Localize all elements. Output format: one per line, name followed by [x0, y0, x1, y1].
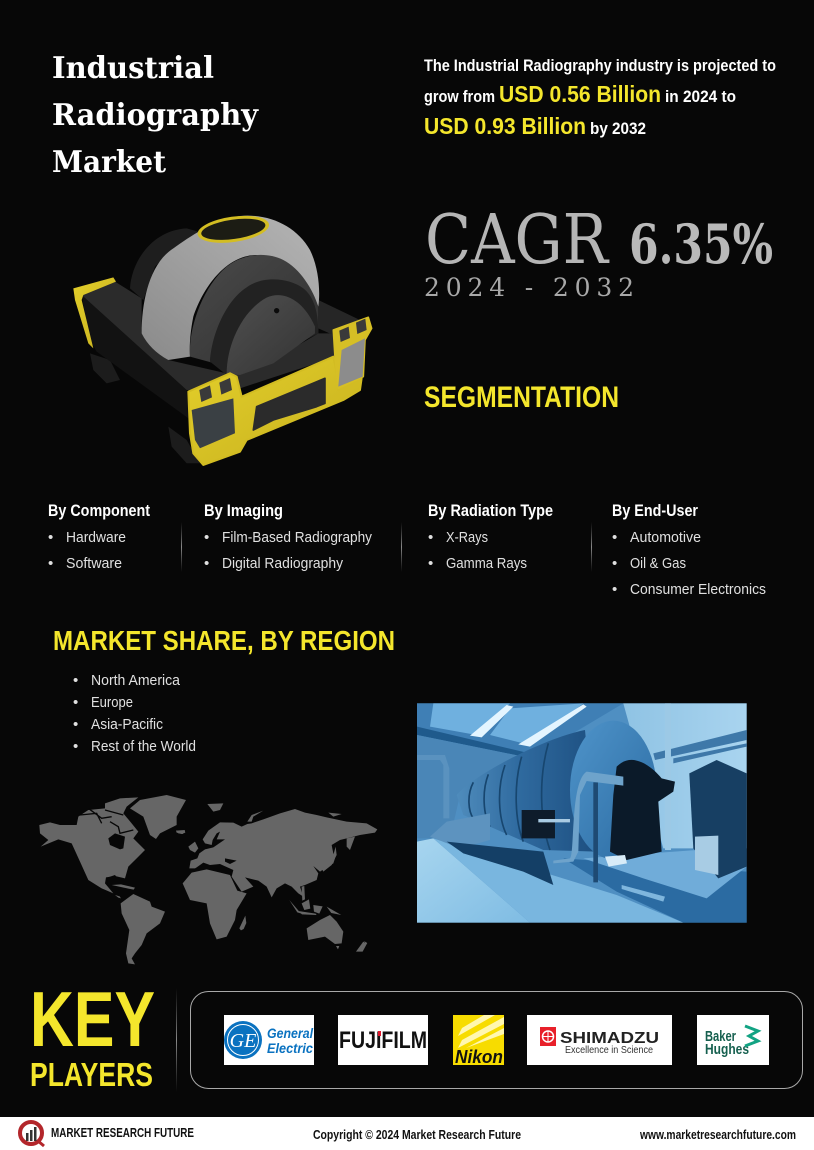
- column: by imaging: [204, 501, 372, 572]
- footer bar: Copyright © 2024 Market Research Future: [313, 1127, 521, 1142]
- column: by radiation type: •: [428, 529, 433, 546]
- market projection text: in 2024 to: [665, 87, 736, 106]
- region list: [73, 672, 196, 755]
- column: by component: By Component: [48, 501, 150, 520]
- market projection text: grow from: [424, 87, 495, 106]
- region list: •: [73, 738, 78, 755]
- market projection text: by 2032: [590, 119, 646, 138]
- logo: Baker Hughes: Baker: [705, 1028, 736, 1045]
- market projection text: USD 0.56 Billion: [499, 81, 661, 107]
- CAGR figure: [424, 201, 773, 302]
- icon: market research future logo: [20, 1122, 44, 1146]
- market projection text: [424, 56, 776, 139]
- region list: Europe: [91, 694, 133, 711]
- title: [52, 51, 260, 180]
- column: by radiation type: X-Rays: [446, 529, 488, 546]
- market projection text: USD 0.93 Billion: [424, 113, 586, 139]
- column: by imaging: Film-Based Radiography: [222, 529, 372, 546]
- logo: Shimadzu: Excellence in Science: [565, 1045, 653, 1056]
- title: Radiography: [52, 98, 260, 133]
- column: by component: [48, 501, 150, 572]
- icon: portable radiography machine: [73, 212, 372, 465]
- column: by radiation type: By Radiation Type: [428, 501, 553, 520]
- column: by imaging: By Imaging: [204, 501, 283, 520]
- region list: •: [73, 672, 78, 689]
- title: Industrial: [52, 51, 214, 86]
- logo: General Electric: General: [267, 1025, 314, 1041]
- region list: •: [73, 694, 78, 711]
- column: by end-user: [612, 501, 766, 598]
- key players heading: PLAYERS: [30, 1056, 153, 1093]
- logo: General Electric: [224, 1015, 314, 1065]
- CAGR figure: CAGR: [425, 201, 610, 280]
- heading: market share by region: MARKET SHARE, BY REGION: [53, 625, 395, 656]
- title: Market: [52, 145, 166, 180]
- column: by radiation type: •: [428, 555, 433, 572]
- CAGR figure: 2024 - 2032: [424, 273, 634, 302]
- footer bar: MARKET RESEARCH FUTURE: [51, 1126, 194, 1140]
- region list: Rest of the World: [91, 738, 196, 755]
- column: by end-user: •: [612, 555, 617, 572]
- column: by end-user: Automotive: [630, 529, 701, 546]
- logo: Fujifilm: [338, 1015, 428, 1065]
- column: by imaging: •: [204, 529, 209, 546]
- CAGR figure: 6.35%: [629, 212, 773, 276]
- heading: segmentation: SEGMENTATION: [424, 381, 619, 414]
- photo: industrial boiler tank: [417, 703, 747, 923]
- column: by end-user: •: [612, 581, 617, 598]
- logo: Baker Hughes: [697, 1015, 769, 1065]
- column: by component: Hardware: [66, 529, 126, 546]
- logo: Baker Hughes: Hughes: [705, 1041, 749, 1058]
- key players heading: [30, 975, 155, 1093]
- logo: Nikon: Nikon: [455, 1047, 503, 1067]
- logo: Nikon: [453, 1015, 504, 1067]
- logo: Shimadzu: SHIMADZU: [560, 1030, 659, 1047]
- region list: •: [73, 716, 78, 733]
- column: by imaging: Digital Radiography: [222, 555, 343, 572]
- key players heading: KEY: [30, 975, 155, 1063]
- column: by radiation type: [428, 501, 553, 572]
- column: by component: •: [48, 555, 53, 572]
- column: by radiation type: Gamma Rays: [446, 555, 527, 572]
- footer bar: [0, 1117, 814, 1150]
- column: by end-user: By End-User: [612, 501, 698, 520]
- column: by component: Software: [66, 555, 122, 572]
- column: by imaging: •: [204, 555, 209, 572]
- logo: General Electric: Electric: [267, 1040, 313, 1056]
- column: by end-user: Oil & Gas: [630, 555, 686, 572]
- region list: Asia-Pacific: [91, 716, 163, 733]
- region list: North America: [91, 672, 181, 689]
- logo: Shimadzu: [527, 1015, 672, 1065]
- column: by end-user: •: [612, 529, 617, 546]
- key players panel: [190, 992, 802, 1088]
- column: by end-user: Consumer Electronics: [630, 581, 766, 598]
- logo: General Electric: GE: [230, 1030, 256, 1052]
- column: by component: •: [48, 529, 53, 546]
- logo: Fujifilm: FUJIFILM: [339, 1027, 427, 1054]
- world map: [39, 795, 377, 964]
